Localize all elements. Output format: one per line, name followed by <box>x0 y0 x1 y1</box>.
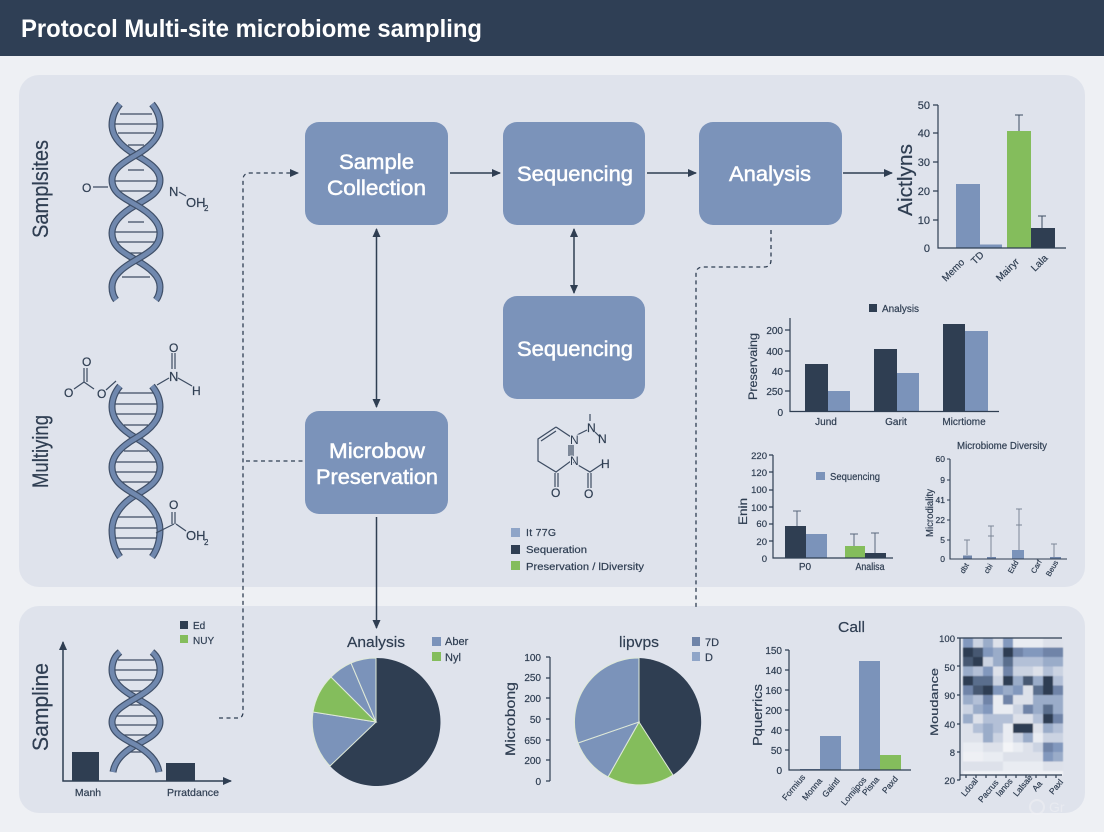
pie chart: lipvps with axis: 200 <box>524 694 541 705</box>
bar chart: microbiome diversity: Edd <box>1006 559 1020 575</box>
dashed arrow: sample line to collection <box>219 173 298 718</box>
pie chart: lipvps with axis: 50 <box>530 715 541 726</box>
legend: centre: Preservation / lDiversity <box>526 561 645 573</box>
bar chart: Call: Paxd <box>880 774 900 795</box>
chemical labels middle helix: OH <box>186 528 206 543</box>
node: Microbow Preservation <box>305 411 448 514</box>
heatmap: Lalsae <box>1011 772 1035 798</box>
bar chart: top right: Memo <box>940 257 968 284</box>
bar chart: microbiome diversity: 60 <box>936 454 945 464</box>
bar chart: top right: 30 <box>918 157 930 169</box>
pie chart: Analysis: Aber <box>445 636 469 648</box>
chart: bottom left sample bars with helix: NUY <box>193 636 214 647</box>
pie chart: lipvps with axis: D <box>705 652 713 664</box>
bar chart: microbiome diversity: Carf <box>1029 557 1044 575</box>
bar chart: lower left: Enin <box>736 498 750 525</box>
bar chart: Call <box>750 620 911 807</box>
heatmap: 90 <box>944 691 955 702</box>
chemical labels top helix: N <box>169 184 178 199</box>
chemical labels middle helix: 2 <box>204 538 209 547</box>
arrow: sequencing bidirectional <box>573 229 575 293</box>
bar chart: lower left: 20 <box>756 537 767 548</box>
chemical labels middle helix <box>64 341 209 547</box>
heatmap <box>929 634 1065 804</box>
bar chart: microbiome diversity: Microdiality <box>924 488 936 537</box>
pie chart: lipvps with axis: 0 <box>535 777 541 788</box>
molecule diagram: O <box>584 487 593 501</box>
watermark: Gr <box>1049 799 1065 815</box>
side label: Multiying: Multiying <box>28 415 53 488</box>
molecule diagram: N <box>570 433 579 447</box>
bar chart: lower left: 120 <box>751 468 767 479</box>
bar chart: middle: Garit <box>885 417 907 428</box>
pie chart: lipvps with axis: 650 <box>524 736 541 747</box>
icon: DNA helix bottom <box>112 652 160 772</box>
bar chart: microbiome diversity: 5 <box>940 535 945 545</box>
node: Sequencing lower <box>503 296 645 399</box>
molecule diagram <box>538 414 610 501</box>
pie chart: Analysis: Analysis <box>347 634 405 651</box>
node: Analysis: Analysis <box>729 163 811 186</box>
bar chart: top right: 50 <box>918 100 930 112</box>
chemical labels middle helix: N <box>169 369 178 384</box>
heatmap: Aa <box>1030 779 1044 793</box>
molecule diagram: N <box>570 454 579 468</box>
chemical labels middle helix: O <box>97 387 106 401</box>
chemical labels top helix <box>82 181 209 213</box>
bar chart: lower left <box>736 451 893 573</box>
bar chart: microbiome diversity: 0 <box>940 554 945 564</box>
bar chart: Call: Call <box>838 620 865 636</box>
pie chart: Analysis: Nyl <box>445 652 461 664</box>
node: Sequencing <box>503 122 645 225</box>
bar chart: microbiome diversity: 41 <box>936 495 945 505</box>
pie chart: lipvps with axis: 250 <box>524 673 541 684</box>
panel: main workflow <box>19 75 1085 587</box>
bar chart: middle: Jund <box>815 417 837 428</box>
bar chart: top right <box>918 100 1066 284</box>
arrow: sequencing to analysis <box>647 172 696 174</box>
molecule diagram: H <box>601 457 610 471</box>
heatmap: 8 <box>950 748 955 759</box>
bar chart: middle: 200 <box>766 326 783 337</box>
bar chart: microbiome diversity: dbt <box>958 561 971 575</box>
bar chart: Call: Monna <box>800 776 824 802</box>
node: Microbow Preservation: Microbow <box>329 440 426 463</box>
chemical labels middle helix: O <box>169 341 178 355</box>
bar chart: Call: Pquerrics <box>750 683 765 746</box>
heatmap: Moudance <box>929 668 941 736</box>
bar chart: Call: 40 <box>771 726 782 737</box>
bar chart: lower left: 0 <box>762 554 767 565</box>
bar chart: microbiome diversity: cbi <box>982 562 995 575</box>
arrow: collection and preservation <box>376 229 378 407</box>
watermark <box>1030 799 1065 815</box>
arrow: collection to sequencing <box>450 172 500 174</box>
pie chart: lipvps with axis <box>502 634 719 788</box>
bar chart: middle: 400 <box>766 347 783 358</box>
pie chart: lipvps with axis: 200 <box>524 756 541 767</box>
bar chart: top right: Lala <box>1029 253 1051 274</box>
pie chart: lipvps with axis: lipvps <box>619 634 659 651</box>
chart: bottom left sample bars with helix: Manh <box>75 787 101 799</box>
molecule diagram: N <box>598 432 607 446</box>
chemical labels top helix: OH <box>186 195 206 210</box>
node: Sample Collection: Sample <box>339 151 414 174</box>
icon: DNA helix top <box>112 104 160 300</box>
title: Protocol Multi-site microbiome sampling <box>21 15 482 43</box>
bar chart: middle: Analysis <box>882 304 919 315</box>
header bar <box>0 0 1104 56</box>
node: Analysis <box>699 122 842 225</box>
heatmap: Pacrus <box>976 778 1001 804</box>
pie chart: lipvps with axis: Microbong <box>502 682 518 756</box>
bar chart: middle: 40 <box>772 367 783 378</box>
bar chart: microbiome diversity: Microbiome Diversity <box>957 440 1048 452</box>
bar chart: middle: 250 <box>766 387 783 398</box>
heatmap: 50 <box>944 663 955 674</box>
chemical labels middle helix: O <box>82 355 91 369</box>
bar chart: top right: TD <box>969 250 987 267</box>
bar chart: microbiome diversity: Beus <box>1044 558 1060 578</box>
side label: Aictlyns: Aictlyns <box>895 144 917 216</box>
legend: centre: Sequeration <box>526 544 587 556</box>
bar chart: Call: 50 <box>771 746 782 757</box>
side label: Samplsites: Samplsites <box>28 140 53 238</box>
bar chart: Call: 200 <box>765 706 782 717</box>
node: Sample Collection: Collection <box>327 177 426 200</box>
chart: bottom left sample bars with helix: Ed <box>193 621 205 632</box>
bar chart: lower left: 100 <box>751 503 767 514</box>
bar chart: middle: Preservaing <box>746 333 760 400</box>
bar chart: lower left: Analisa <box>856 562 885 573</box>
bar chart: Call: Pisna <box>860 774 881 797</box>
heatmap: 20 <box>944 776 955 787</box>
bar chart: lower left: 220 <box>751 451 767 462</box>
bar chart: middle: Micrtiome <box>942 417 986 428</box>
heatmap: Paxl <box>1047 777 1065 796</box>
heatmap: 100 <box>939 634 955 645</box>
bar chart: Call: Gaintl <box>820 776 842 799</box>
chart: bottom left sample bars with helix: Prratdance <box>167 787 219 799</box>
bar chart: Call: Formius <box>780 772 807 802</box>
bar chart: Call: 150 <box>765 646 782 657</box>
chemical labels middle helix: O <box>64 386 73 400</box>
bar chart: middle <box>746 304 999 428</box>
bar chart: middle: 0 <box>777 408 783 419</box>
bar chart: Call: 140 <box>765 666 782 677</box>
bar chart: lower left: P0 <box>799 562 812 573</box>
legend: centre: It 77G <box>526 527 556 539</box>
molecule diagram: N <box>587 421 596 435</box>
heatmap: 40 <box>944 720 955 731</box>
bar chart: Call: 0 <box>776 766 782 777</box>
heatmap: Ldoal <box>959 776 980 798</box>
icon: DNA helix middle <box>112 386 160 557</box>
node: Microbow Preservation: Preservation <box>316 466 438 489</box>
bar chart: microbiome diversity: 9 <box>940 475 945 485</box>
bar chart: lower left: Sequencing <box>830 471 880 483</box>
node: Sample Collection <box>305 122 448 225</box>
pie chart: Analysis <box>312 634 469 786</box>
node: Sequencing lower: Sequencing <box>517 338 633 361</box>
bar chart: lower left: 100 <box>751 485 767 496</box>
bar chart: Call: 160 <box>765 686 782 697</box>
chemical labels middle helix: H <box>192 384 201 398</box>
bar chart: microbiome diversity <box>924 440 1067 578</box>
pie chart: lipvps with axis: 100 <box>524 653 541 664</box>
bar chart: top right: 40 <box>918 128 930 140</box>
bar chart: Call: Lomijpos <box>839 775 868 807</box>
chemical labels top helix: 2 <box>204 204 209 213</box>
dashed connector: preservation <box>246 460 304 462</box>
chemical labels middle helix: O <box>169 498 178 512</box>
dashed connector: analysis to bottom <box>696 230 771 607</box>
bar chart: microbiome diversity: 22 <box>936 515 945 525</box>
molecule diagram: O <box>551 486 560 500</box>
heatmap: lanos <box>994 776 1015 798</box>
bar chart: top right: 20 <box>918 186 930 198</box>
node: Sequencing: Sequencing <box>517 163 633 186</box>
side label: Sampline: Sampline <box>28 663 53 751</box>
legend: centre <box>511 527 645 573</box>
panel: bottom charts <box>19 606 1085 813</box>
arrow: preservation to analysis pie <box>376 517 378 628</box>
bar chart: top right: 0 <box>924 243 930 255</box>
bar chart: top right: 10 <box>918 215 930 227</box>
chemical labels top helix: O <box>82 181 91 195</box>
pie chart: lipvps with axis: 7D <box>705 637 719 649</box>
bar chart: lower left: 60 <box>756 519 767 530</box>
arrow: analysis to chart <box>843 172 892 174</box>
bar chart: top right: Mairyr <box>994 256 1022 284</box>
chart: bottom left sample bars with helix <box>63 621 231 799</box>
